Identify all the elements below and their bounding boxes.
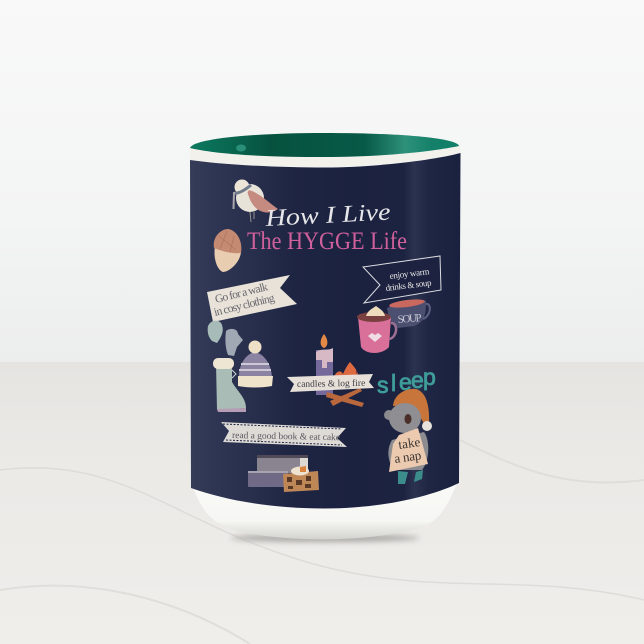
banner: enjoy warm drinks: drinks & soup bbox=[385, 277, 432, 293]
banner: read a good book bbox=[221, 422, 347, 447]
icon: candle bbox=[316, 334, 333, 395]
title: The HYGGE Life: The HYGGE Life bbox=[247, 228, 407, 255]
icon: books and cake bbox=[248, 455, 319, 492]
artwork on mug bbox=[207, 180, 441, 492]
text: sleep: e bbox=[399, 369, 412, 395]
mug rim and interior bbox=[190, 133, 460, 167]
sign text: take a nap bbox=[393, 434, 422, 466]
icon: bobble hat bbox=[238, 340, 273, 388]
icon: soup bowl bbox=[387, 298, 430, 328]
icon: bear with sign bbox=[384, 389, 432, 484]
marble table bbox=[0, 362, 644, 644]
icon: acorn bbox=[214, 229, 241, 272]
banner: go for a walk: Go for a walk bbox=[214, 281, 269, 306]
banner: candles and log fire: candles & log fire bbox=[297, 378, 365, 390]
banner: go for a walk bbox=[207, 275, 297, 322]
wall background bbox=[0, 0, 644, 364]
banner: candles and log fire bbox=[287, 374, 374, 392]
sign text: take a nap: take bbox=[397, 434, 421, 452]
text: sleep: l bbox=[391, 370, 396, 396]
icon: mittens bbox=[208, 321, 243, 356]
title: How I Live: How I Live bbox=[264, 199, 392, 232]
banner: enjoy warm drinks bbox=[363, 256, 441, 303]
banner: enjoy warm drinks: enjoy warm bbox=[389, 266, 430, 281]
illustration: bird bbox=[234, 180, 278, 222]
mug bbox=[190, 133, 460, 539]
navy mug body bbox=[190, 153, 460, 508]
text: sleep bbox=[377, 364, 436, 398]
sign text: take a nap: a nap bbox=[393, 447, 422, 466]
banner: read a good book: read a good book & eat cake bbox=[232, 431, 340, 443]
mug white base bbox=[191, 478, 459, 539]
banner: go for a walk: in cosy clothing bbox=[213, 292, 276, 319]
icon: log fire bbox=[326, 362, 364, 407]
text: sleep: p bbox=[423, 364, 436, 390]
icon: snow boot bbox=[213, 358, 246, 412]
icon: pink mug with cream bbox=[357, 306, 396, 353]
icon: soup bowl: SOUP bbox=[397, 312, 422, 326]
text: sleep: e bbox=[411, 367, 424, 393]
text: sleep: s bbox=[377, 372, 388, 398]
